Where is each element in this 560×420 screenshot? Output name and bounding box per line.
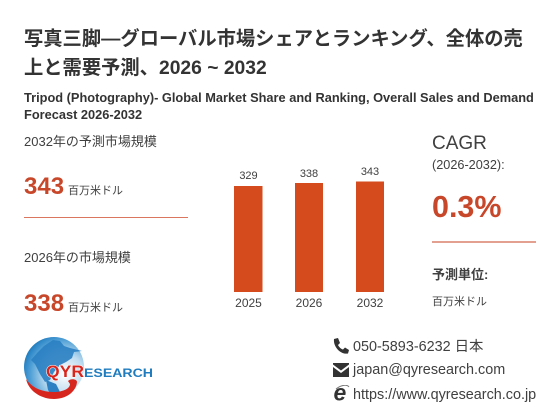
subtitle: Forecast 2026-2032 bbox=[24, 107, 142, 122]
CAGR period: (2026-2032): bbox=[432, 158, 505, 172]
forecast unit value: 百万米ドル bbox=[432, 296, 487, 308]
contact: website: https://www.qyresearch.co.jp bbox=[353, 387, 536, 403]
globe bbox=[24, 337, 84, 399]
bar: 2025: 329 bbox=[239, 170, 258, 182]
logo: QYResearch bbox=[24, 337, 153, 399]
subtitle: Tripod (Photography)- Global Market Share and Ranking, Overall Sales and Demand bbox=[24, 90, 534, 105]
CAGR value: 0.3% bbox=[432, 190, 502, 224]
title: 写真三脚―グローバル市場シェアとランキング、全体の売 bbox=[24, 29, 523, 50]
bar: 2025: 2025 bbox=[235, 296, 262, 310]
label: 2026 market size: 2026年の市場規模 bbox=[24, 250, 131, 265]
bar: 2026 bbox=[295, 168, 323, 310]
wordmark: ESEARCH bbox=[84, 368, 153, 380]
title: 上と需要予測、2026 ~ 2032 bbox=[24, 58, 267, 79]
contact: email: japan@qyresearch.com bbox=[353, 362, 505, 378]
bar: 2026: 2026 bbox=[296, 296, 323, 310]
wordmark bbox=[46, 362, 153, 381]
stat: 2026 value: 338 百万米ドル bbox=[24, 290, 123, 317]
bar chart bbox=[234, 166, 384, 310]
title bbox=[24, 28, 523, 79]
forecast unit heading: 予測単位: bbox=[432, 267, 488, 282]
wordmark: QYR bbox=[46, 362, 84, 381]
bar: 2032: 2032 bbox=[357, 296, 384, 310]
bar: 2026: 338 bbox=[300, 168, 318, 180]
bar: 2032: 343 bbox=[361, 166, 379, 178]
bar: 2032 bbox=[356, 166, 384, 310]
contact: phone: 050-5893-6232 日本 bbox=[353, 339, 483, 355]
subtitle bbox=[24, 90, 534, 122]
label: 2032 forecast market size: 2032年の予測市場規模 bbox=[24, 134, 157, 149]
CAGR label: CAGR bbox=[432, 133, 487, 154]
bar: 2025 bbox=[234, 170, 262, 310]
stat: 2032 value: 343 百万米ドル bbox=[24, 173, 123, 200]
